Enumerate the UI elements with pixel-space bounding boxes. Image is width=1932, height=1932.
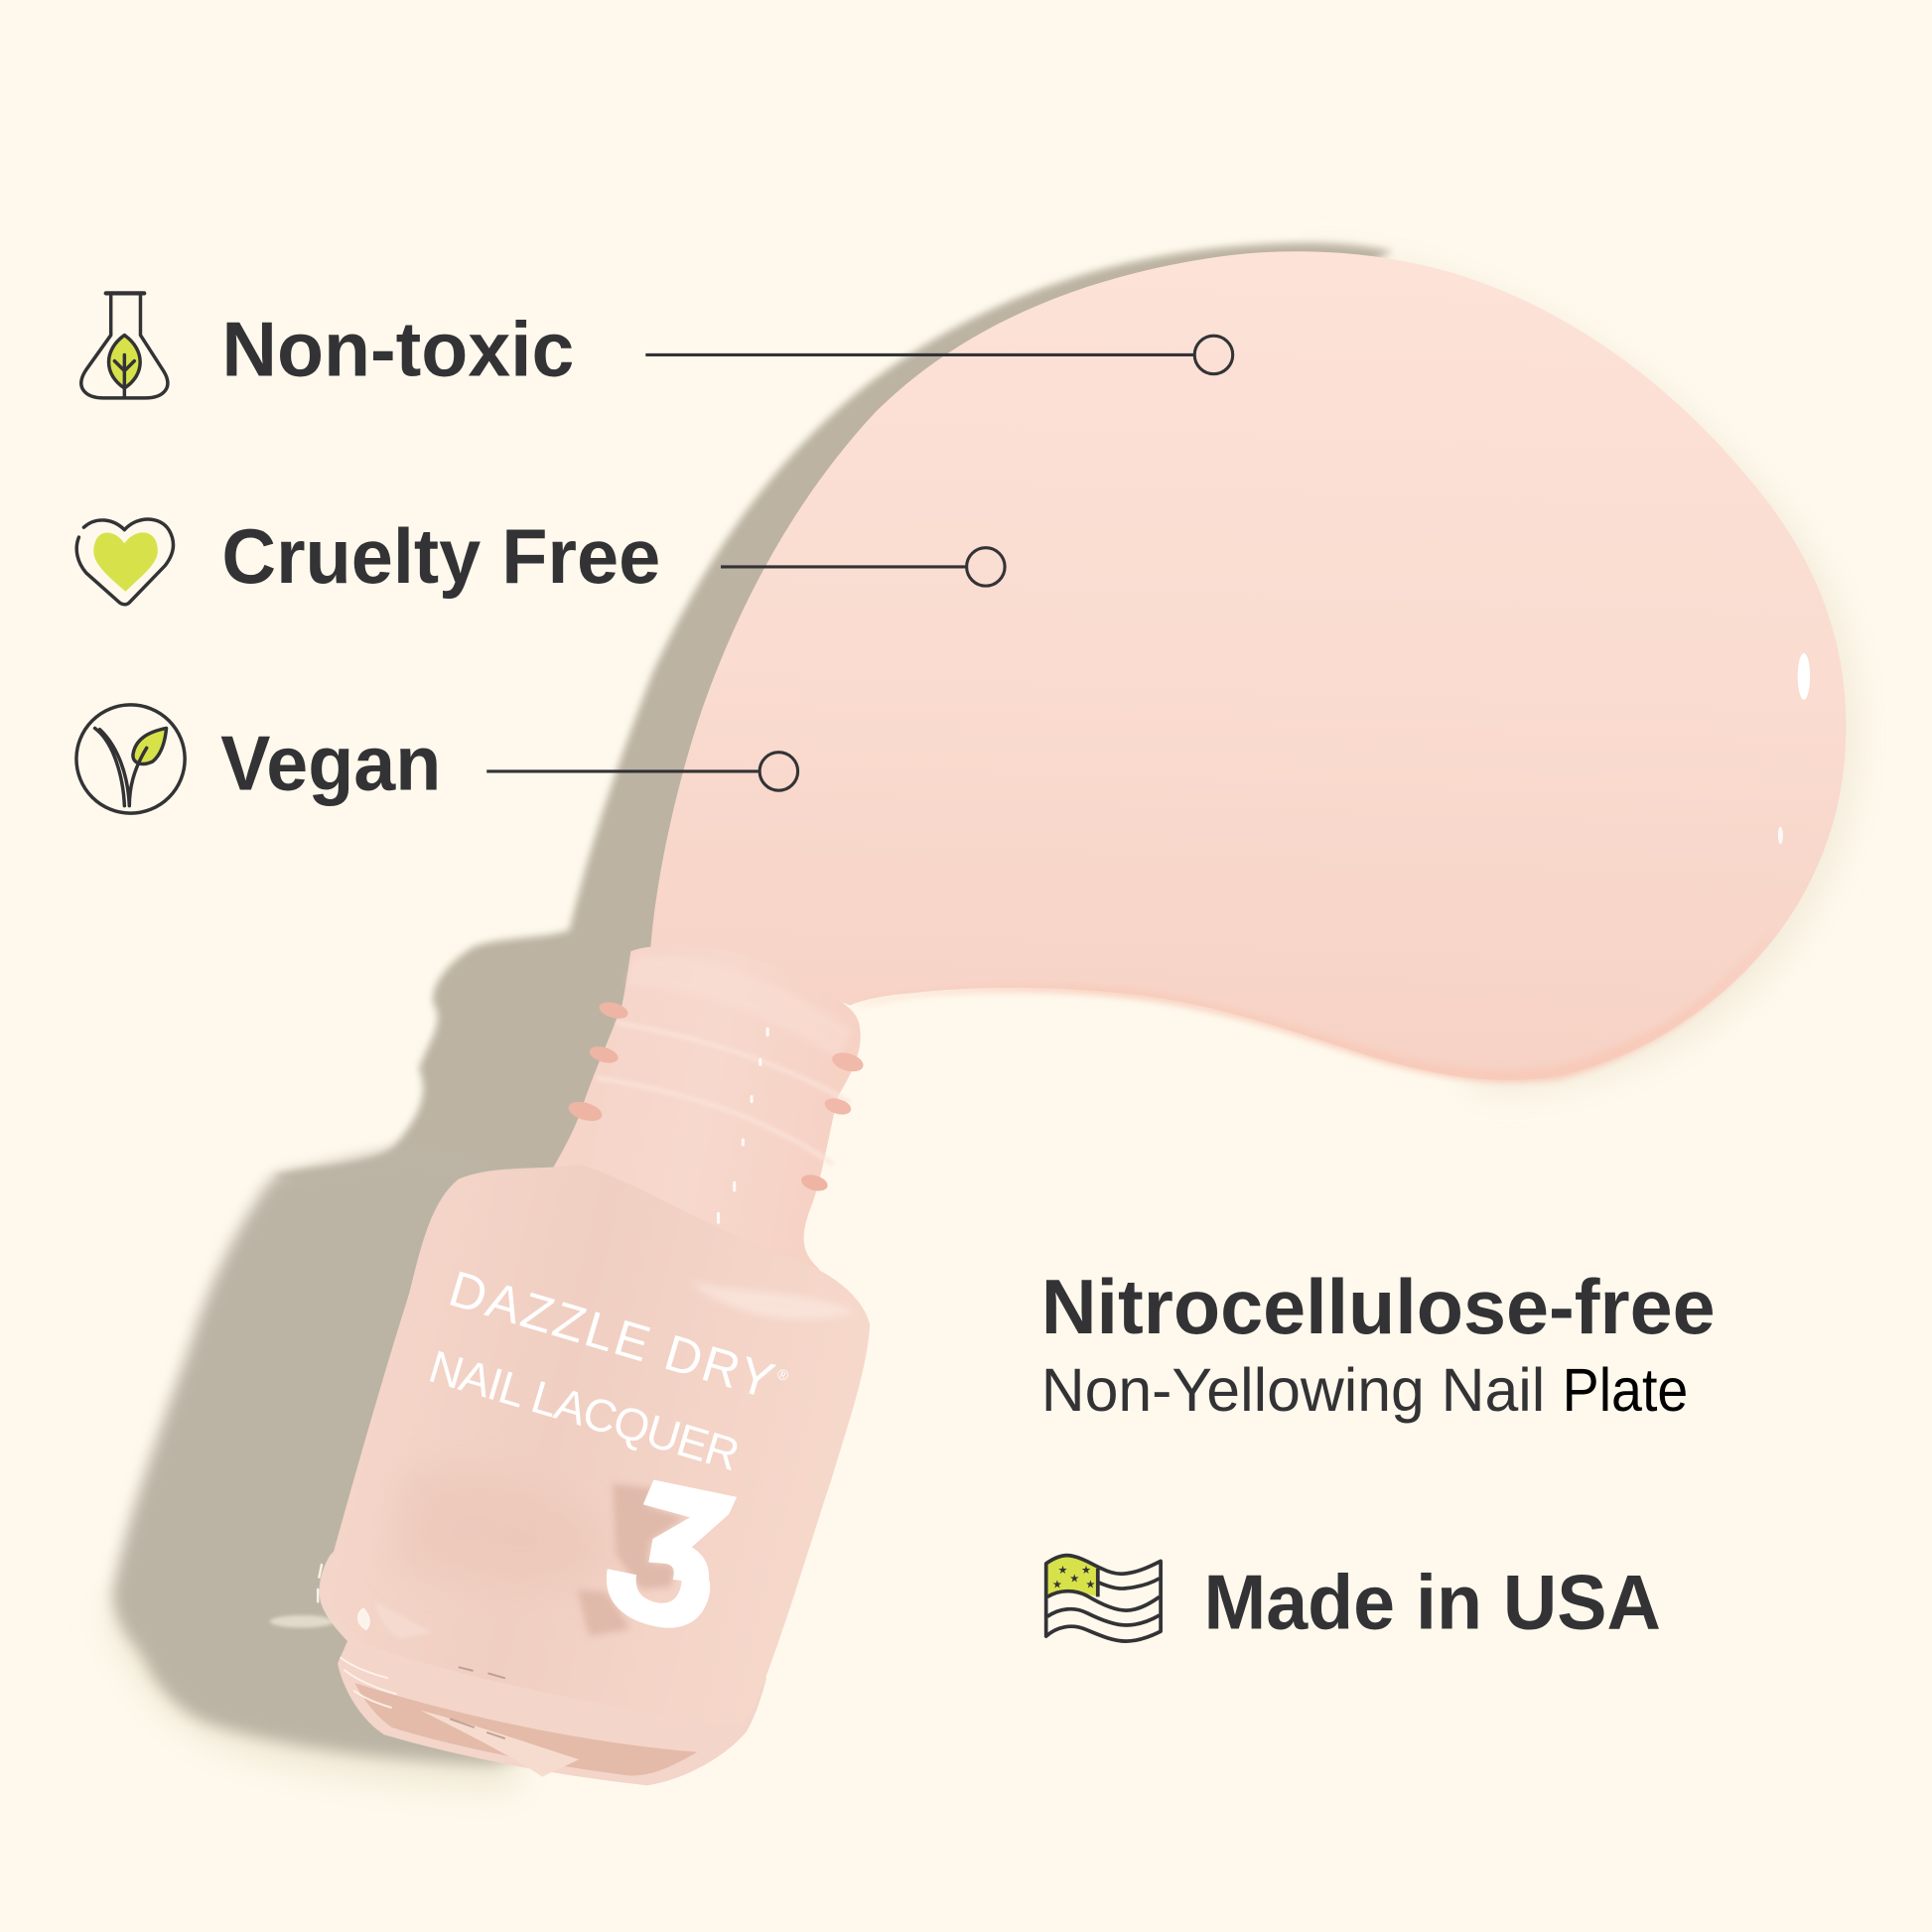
soft shadow around swatch: [1307, 252, 1858, 1091]
cast shadow of bottle body: [112, 1146, 690, 1764]
swatch bottom edge tint: [850, 921, 1780, 1082]
base glass lines: [341, 1657, 397, 1708]
subheading: Non-Yellowing Nail: [1041, 1356, 1545, 1424]
connector end circle: [759, 753, 798, 790]
label: non-toxic: Non-toxic: [221, 306, 574, 393]
icon: flask with leaf: [81, 293, 168, 398]
neck ring lines: [597, 1023, 850, 1165]
polish swatch: [650, 251, 1846, 1082]
neck sparkles: [719, 1029, 767, 1222]
thread left 3: [566, 1098, 605, 1125]
thread right 3: [799, 1173, 830, 1193]
nail polish bottle: [318, 945, 870, 1785]
thread right 1: [830, 1049, 866, 1075]
product label: NAIL LACQUER: [424, 1340, 746, 1480]
bottle body: [330, 1165, 870, 1725]
brand label: DAZZLE DRY: [443, 1260, 780, 1410]
connector line: [645, 353, 1194, 356]
stars: ★★★★★: [1052, 1564, 1095, 1591]
connector line: [486, 770, 759, 772]
feature: vegan: [76, 705, 798, 813]
icon: flag: [1046, 1556, 1161, 1641]
nitrocellulose-free block: [1041, 1263, 1716, 1424]
feature: non-toxic: [81, 293, 1233, 398]
base reflection sliver: [420, 1711, 579, 1777]
body shade: [394, 1471, 617, 1587]
brand label: ®: [775, 1367, 790, 1385]
swatch highlight large: [1798, 653, 1810, 700]
number shadow: [577, 1483, 685, 1636]
made in usa block: [1046, 1556, 1661, 1646]
base chip: [376, 1601, 431, 1639]
base sparkles: [318, 1565, 369, 1629]
infographic canvas: [74, 238, 1859, 1795]
light streak in shadow near base: [270, 1615, 334, 1627]
heading: Nitrocellulose-free: [1041, 1263, 1716, 1350]
connector line: [721, 566, 967, 568]
label: cruelty free: Cruelty Free: [221, 512, 660, 600]
label: vegan: Vegan: [220, 720, 441, 807]
base inner band: [354, 1683, 697, 1775]
feature: cruelty free: [76, 512, 1005, 605]
thread left 1: [598, 999, 629, 1022]
number 3: 3: [579, 1423, 759, 1683]
swatch shape: [650, 251, 1846, 1080]
label: made in usa: Made in USA: [1204, 1559, 1661, 1646]
glass base: [320, 1528, 766, 1785]
bottle neck: [517, 945, 861, 1355]
cast shadow of swatch and bottle neck: [274, 243, 1392, 1232]
subheading end word: Plate: [1563, 1356, 1688, 1424]
swatch highlight small: [1778, 827, 1783, 844]
shoulder highlight: [690, 1282, 857, 1319]
icon: sprout in circle: [76, 705, 185, 813]
number top stroke: [643, 1480, 737, 1584]
base specks: [450, 1667, 505, 1738]
neck glass highlight: [625, 956, 853, 1059]
thread left 2: [588, 1043, 620, 1066]
number 3: [606, 1479, 737, 1628]
connector end circle: [1194, 336, 1233, 374]
icon: heart: [76, 519, 173, 605]
shadow halo under bottle: [104, 1601, 517, 1789]
thread right 2: [823, 1096, 853, 1117]
connector end circle: [967, 548, 1005, 586]
